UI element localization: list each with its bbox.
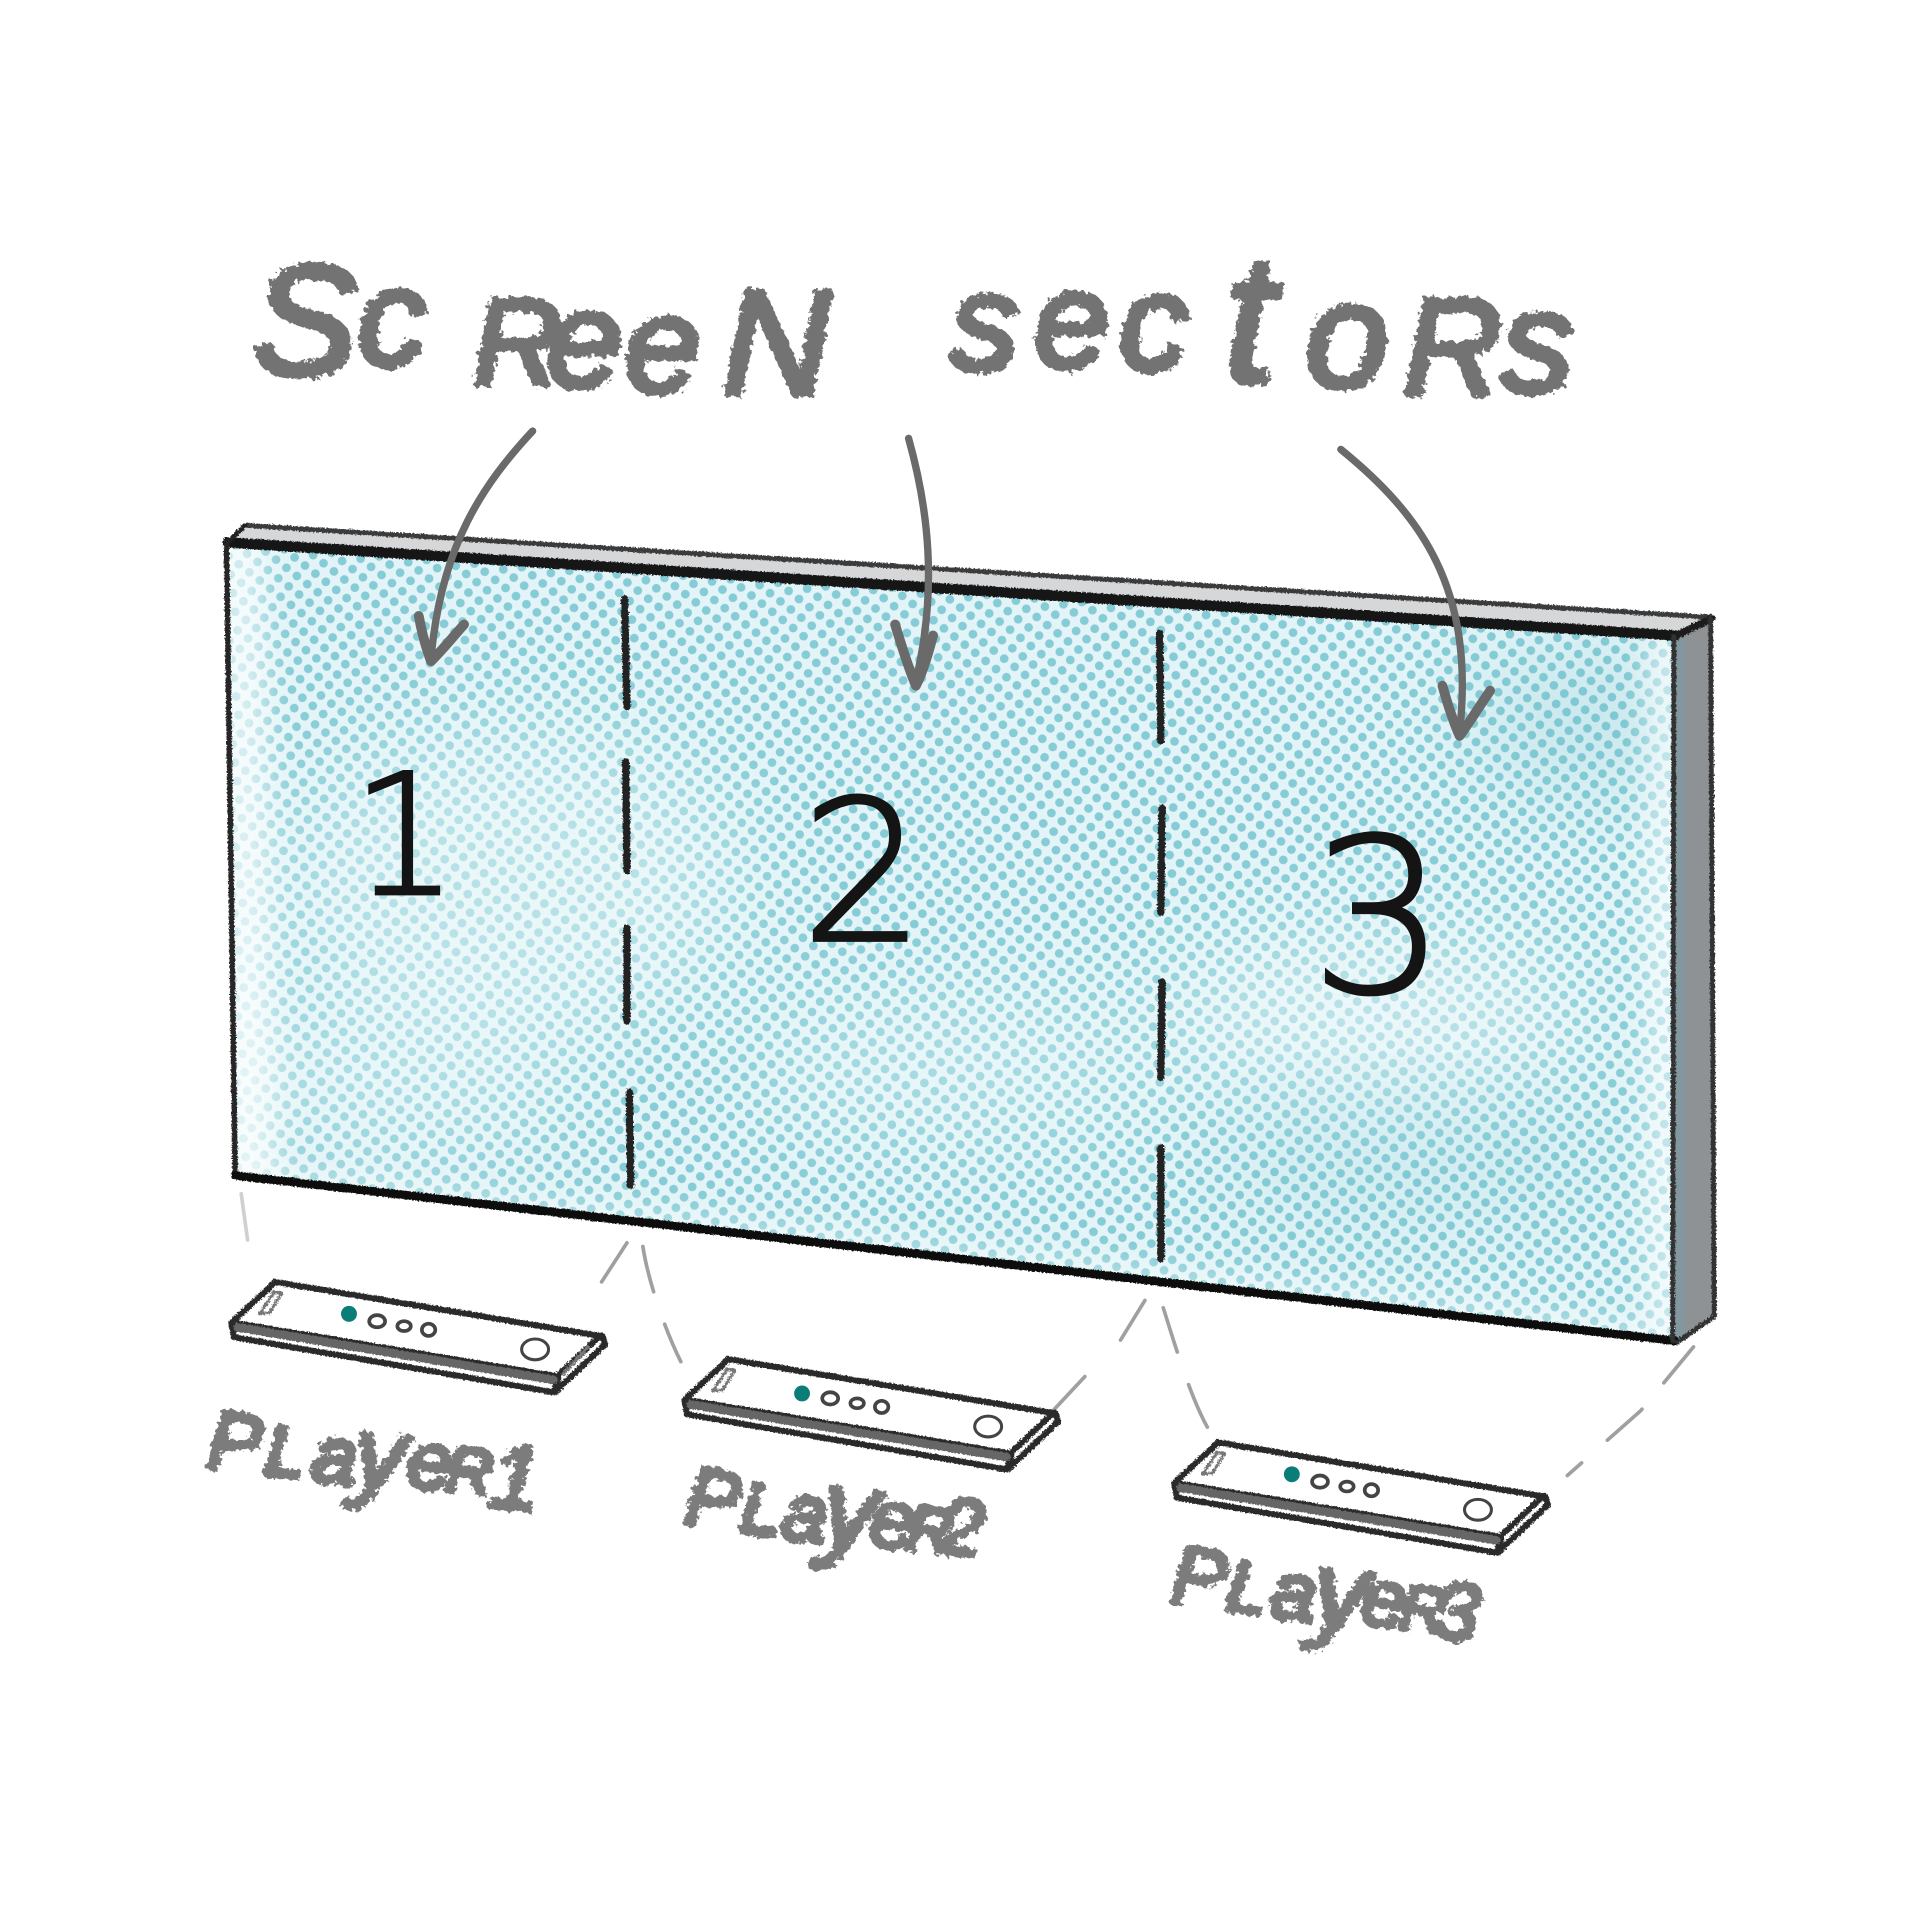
title: c: [1119, 247, 1188, 400]
label: player 1: 1: [486, 1426, 545, 1531]
title: N: [722, 259, 830, 426]
label: player 1: y: [344, 1394, 416, 1514]
label: player 3: L: [1223, 1547, 1271, 1630]
title: e: [1033, 244, 1110, 397]
label: player 2: [680, 1432, 991, 1586]
arrow: to sector 1: [419, 431, 533, 661]
label: player 3: R: [1397, 1571, 1450, 1647]
numeral 3: 3: [1310, 793, 1447, 1043]
label: player 3: e: [1357, 1552, 1411, 1647]
title: s: [950, 247, 1019, 400]
label: player 2: R: [903, 1492, 956, 1568]
label: player 1: [203, 1382, 546, 1531]
player device 2: [684, 1359, 1058, 1469]
title: o: [1305, 252, 1388, 419]
numeral 1: 1: [351, 738, 458, 934]
player device 3: [1174, 1442, 1548, 1553]
title: [252, 216, 1573, 426]
label: player 3: y: [1300, 1527, 1381, 1656]
arrow: to sector 2: [895, 438, 933, 686]
sector dividers: [624, 599, 1162, 1259]
screen outlines: [227, 525, 1714, 1342]
label: player 1: L: [263, 1412, 309, 1494]
title: e: [624, 269, 701, 422]
arrow: to sector 3: [1341, 449, 1490, 736]
title: t: [1224, 216, 1282, 421]
label: player 3: P: [1168, 1530, 1231, 1625]
label: player 2: P: [681, 1452, 744, 1547]
label: player 2: y: [809, 1446, 890, 1575]
title: s: [1501, 261, 1573, 423]
screen face with halftone: [208, 527, 1690, 1359]
title: R: [473, 273, 561, 410]
label: player 1: a: [309, 1409, 361, 1503]
title: c: [358, 242, 426, 395]
screen: [208, 524, 1714, 1359]
label: player 1: R: [443, 1434, 495, 1508]
label: player 1: e: [404, 1415, 457, 1509]
player device 1: [231, 1282, 605, 1392]
label: player 3: a: [1267, 1545, 1321, 1640]
projection guide lines: [241, 1194, 1693, 1476]
illustration: screen sectors: [204, 260, 1718, 1654]
screen right side: [1674, 618, 1714, 1341]
label: player 1: P: [204, 1395, 266, 1490]
title: S: [252, 234, 357, 409]
label: player 2: a: [778, 1467, 832, 1561]
title: R: [1403, 271, 1502, 424]
title: e: [546, 264, 622, 417]
numeral 2: 2: [801, 759, 925, 987]
label: player 2: L: [737, 1469, 785, 1552]
label: player 3: 3: [1430, 1565, 1484, 1659]
label: player 2: 2: [933, 1481, 989, 1575]
label: player 3: [1166, 1513, 1487, 1668]
screen top edge: [228, 524, 1712, 637]
label: player 2: e: [866, 1474, 920, 1568]
